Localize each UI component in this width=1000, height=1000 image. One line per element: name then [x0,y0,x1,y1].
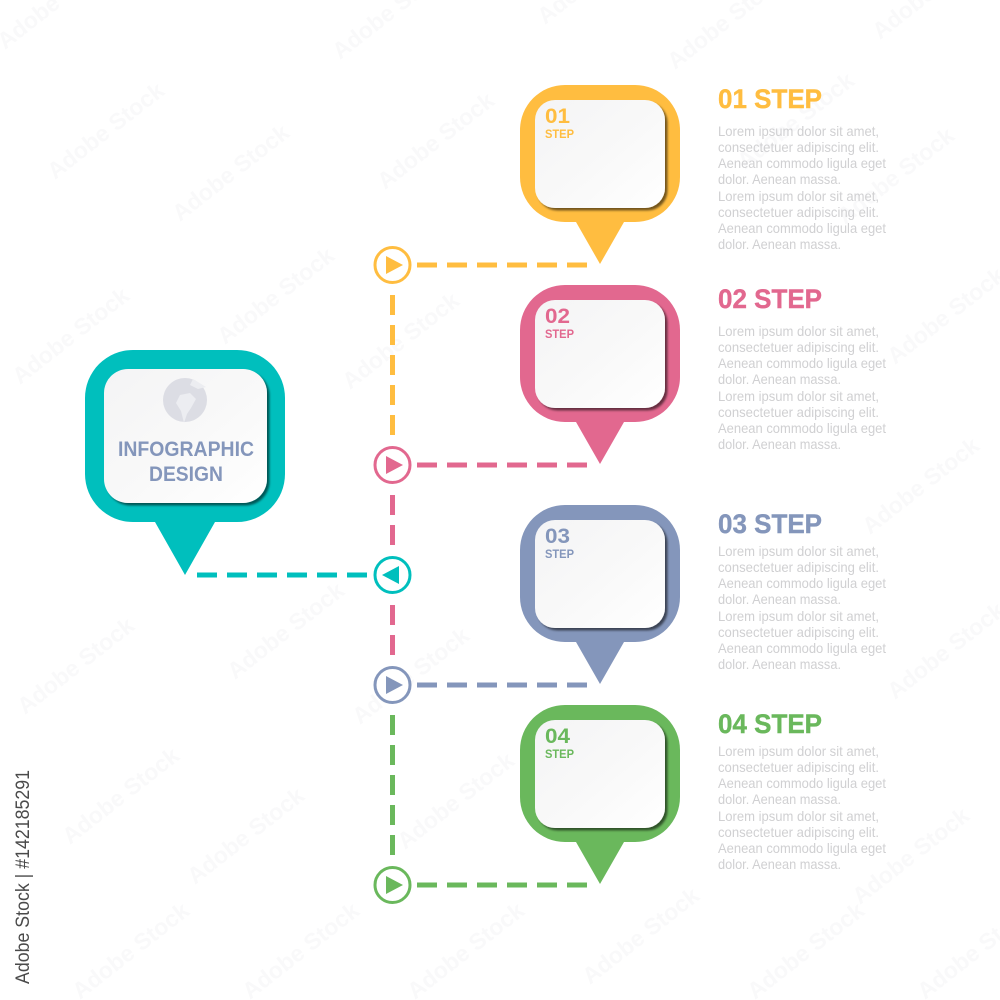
panel: step 02 pin: 02 [545,305,570,328]
watermark pattern: Adobe Stock [42,77,169,184]
text block: step 04 description: Aenean commodo ligula eget [718,775,886,791]
text block: step 04 description: Lorem ipsum dolor sit amet, [718,808,879,824]
text block: step 03 description: dolor. Aenean massa. [718,591,841,607]
panel: step 04 pin: 04 [545,725,570,748]
panel: step 03 pin: 03 [545,525,570,548]
text block: step 01 description: Aenean commodo ligula eget [718,220,886,236]
watermark pattern: Adobe Stock [577,882,704,989]
heading: infographic design [118,438,254,486]
text block: step 03 description: Lorem ipsum dolor sit amet, [718,543,879,559]
connector: horizontal green dashes [417,882,587,888]
text block: step 04 description [718,743,886,872]
panel: step 01 pin: STEP [545,129,574,141]
text block: step 03 description: Aenean commodo ligula eget [718,640,886,656]
watermark pattern: Adobe Stock [337,287,464,394]
connector: horizontal blue dashes [417,682,587,688]
text block: step 02 description: Lorem ipsum dolor sit amet, [718,323,879,339]
watermark pattern: Adobe Stock [857,432,984,539]
text block: step 03 description: consectetuer adipiscing elit. [718,624,879,640]
watermark pattern: Adobe Stock [12,612,139,719]
text block: step 01 description: Lorem ipsum dolor sit amet, [718,123,879,139]
watermark pattern: Adobe Stock [372,87,499,194]
panel: step 02 pin: STEP [545,329,574,341]
text block: step 04 description: dolor. Aenean massa. [718,856,841,872]
watermark pattern: Adobe Stock [832,122,959,229]
heading: 02 step: 02 STEP [718,284,822,314]
text block: step 02 description: consectetuer adipiscing elit. [718,339,879,355]
connector: vertical green dashes [390,715,395,855]
connector: horizontal pink dashes [417,462,587,468]
watermark pattern: Adobe Stock [212,242,339,349]
text block: step 02 description: Lorem ipsum dolor sit amet, [718,388,879,404]
watermark pattern: Adobe Stock [57,742,184,849]
watermark pattern: Adobe Stock [347,622,474,729]
watermark pattern: Adobe Stock [222,577,349,684]
icon: green play node [375,868,410,902]
heading: 01 step: 01 STEP [718,84,822,114]
text block: step 04 description: Aenean commodo ligula eget [718,840,886,856]
watermark pattern: Adobe Stock [732,67,859,174]
text block: step 04 description: consectetuer adipiscing elit. [718,759,879,775]
text block: step 03 description: dolor. Aenean massa. [718,656,841,672]
panel: step 03 pin: STEP [545,549,574,561]
stock credit: Adobe Stock | #142185291 [13,770,34,984]
watermark pattern: Adobe Stock [847,802,974,909]
text block: step 02 description: dolor. Aenean massa. [718,436,841,452]
text block: step 03 description: Lorem ipsum dolor sit amet, [718,608,879,624]
text block: step 03 description: consectetuer adipiscing elit. [718,559,879,575]
text block: step 01 description: consectetuer adipiscing elit. [718,139,879,155]
text block: step 03 description [718,543,886,672]
text block: step 02 description [718,323,886,452]
panel: step 03 pin [520,505,680,684]
text block: step 02 description: dolor. Aenean massa. [718,371,841,387]
text block: step 01 description: Lorem ipsum dolor sit amet, [718,188,879,204]
connector: horizontal orange dashes [417,262,587,268]
heading: 04 step: 04 STEP [718,709,822,739]
connector: vertical orange dashes [390,295,395,435]
panel: step 04 pin [520,705,680,884]
watermark pattern: Adobe Stock [392,747,519,854]
text block: step 01 description: dolor. Aenean massa. [718,236,841,252]
text block: step 02 description: consectetuer adipiscing elit. [718,404,879,420]
heading: infographic design: INFOGRAPHIC [118,438,254,461]
icon: pink play node [375,448,410,482]
panel: step 04 pin: STEP [545,749,574,761]
panel: central infographic design pin [85,350,285,575]
icon: teal reverse play node [375,558,410,592]
icon: globe [163,378,207,423]
text block: step 01 description: Aenean commodo ligula eget [718,155,886,171]
text block: step 01 description [718,123,886,252]
text block: step 03 description: Aenean commodo ligula eget [718,575,886,591]
panel: step 02 pin [520,285,680,464]
text block: step 01 description: dolor. Aenean massa. [718,171,841,187]
text block: step 02 description: Aenean commodo ligula eget [718,355,886,371]
watermark pattern: Adobe Stock [7,282,134,389]
heading: 03 step: 03 STEP [718,509,822,539]
text block: step 04 description: Lorem ipsum dolor sit amet, [718,743,879,759]
text block: step 04 description: consectetuer adipiscing elit. [718,824,879,840]
text block: step 02 description: Aenean commodo ligula eget [718,420,886,436]
watermark pattern: Adobe Stock [167,119,294,226]
text block: step 01 description: consectetuer adipiscing elit. [718,204,879,220]
text block: step 04 description: dolor. Aenean massa. [718,791,841,807]
heading: infographic design: DESIGN [149,463,223,486]
icon: blue play node [375,668,410,702]
connector: vertical pink dashes [390,495,395,655]
panel: step 01 pin: 01 [545,105,570,128]
panel: step 01 pin [520,85,680,264]
icon: orange play node [375,248,410,282]
watermark pattern: Adobe Stock [182,782,309,889]
connector: horizontal teal dashes [197,572,367,578]
